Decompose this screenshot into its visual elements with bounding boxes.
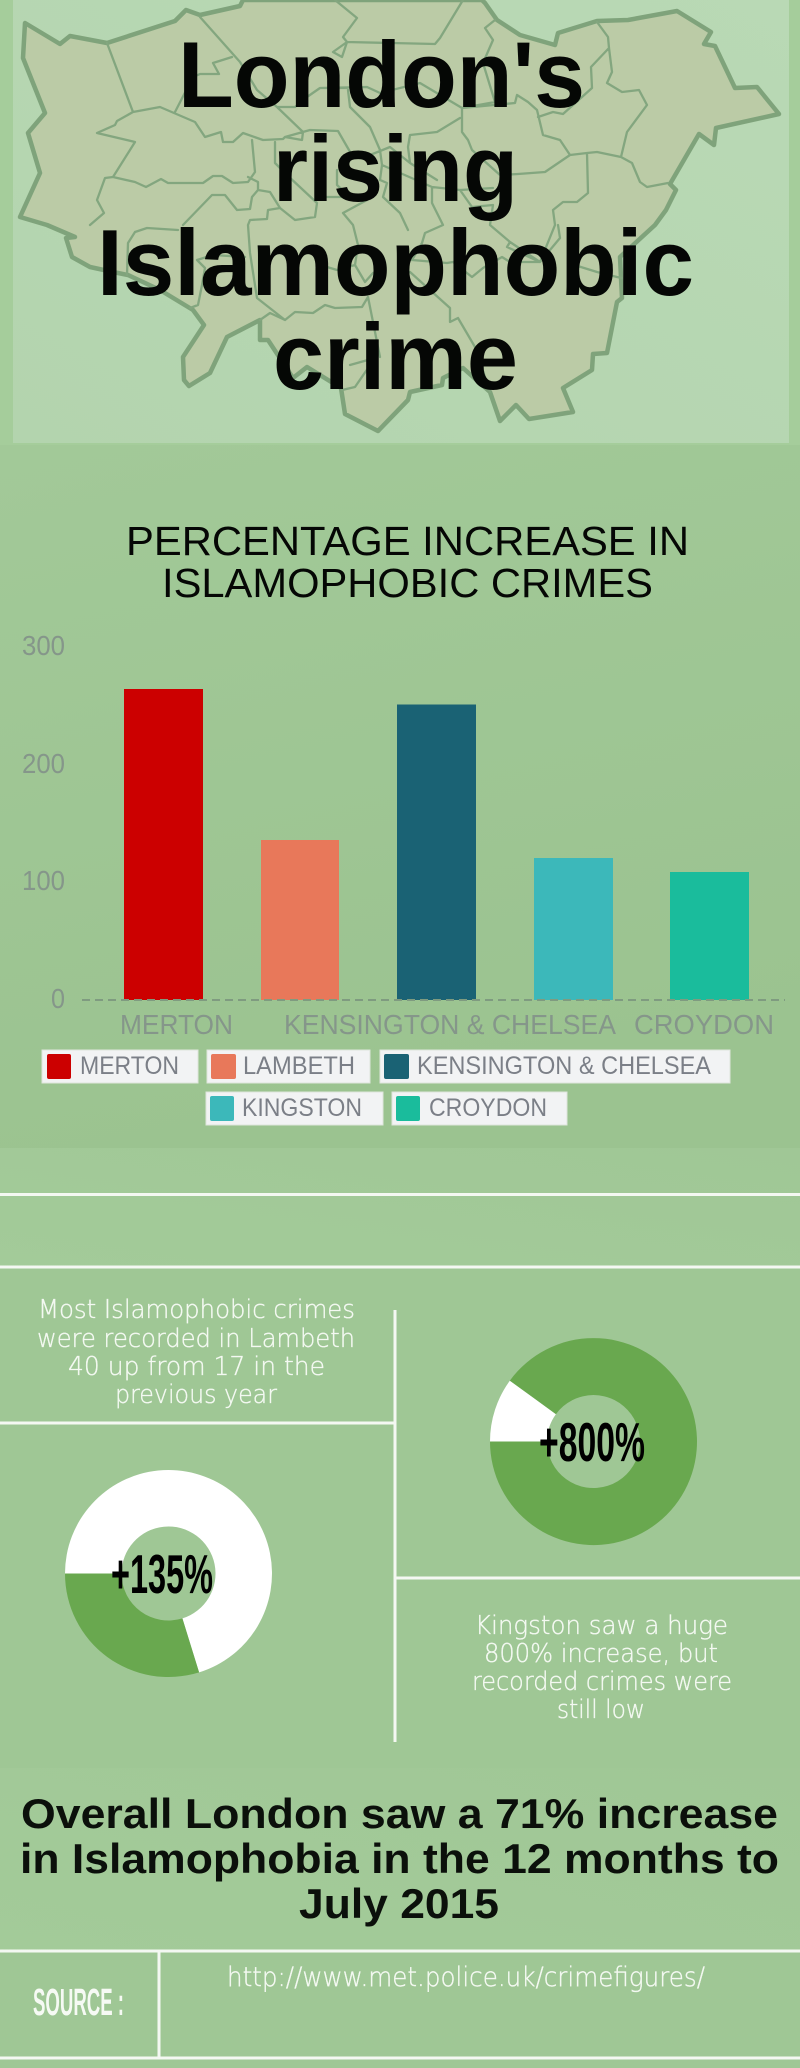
text block: Lambeth: previous year [115, 1380, 277, 1410]
legend: KINGSTON [242, 1094, 362, 1122]
title: Islamophobic [97, 210, 694, 315]
text block: Kingston: still low [557, 1695, 645, 1725]
title: rising [273, 116, 518, 221]
map of London boroughs [20, 0, 779, 431]
chart heading: ISLAMOPHOBIC CRIMES [162, 560, 653, 606]
text block: Kingston [472, 1611, 732, 1725]
text block: Lambeth [37, 1295, 355, 1410]
y axis labels: 100 [22, 865, 65, 896]
donut chart: +800% [490, 1338, 697, 1545]
callout: overall increase [20, 1790, 779, 1927]
x axis labels: CROYDON [634, 1009, 774, 1040]
text block: Lambeth: Most Islamophobic crimes [38, 1295, 355, 1325]
panel: hero [13, 0, 789, 443]
chart heading: PERCENTAGE INCREASE IN [126, 518, 689, 564]
text block: Lambeth: were recorded in Lambeth [37, 1324, 355, 1354]
callout: overall increase: in Islamophobia in the 12 months to [20, 1835, 779, 1882]
y axis labels: 300 [22, 630, 65, 661]
donut chart: +800%: +800% [539, 1411, 645, 1473]
y axis labels: 200 [22, 748, 65, 779]
x axis labels [120, 1009, 774, 1040]
title: crime [273, 304, 518, 409]
y axis labels: 0 [51, 983, 65, 1014]
legend [42, 1050, 730, 1125]
text block: Kingston: recorded crimes were [472, 1667, 732, 1697]
y axis labels [22, 630, 65, 1014]
text block: Kingston: 800% increase, but [484, 1639, 718, 1669]
x axis labels: KENSINGTON & CHELSEA [284, 1009, 616, 1040]
x axis labels: MERTON [120, 1009, 233, 1040]
text: SOURCE : [33, 1982, 124, 2024]
donut chart: +135%: +135% [111, 1543, 213, 1605]
source url: http://www.met.police.uk/crimefigures/ [227, 1962, 705, 1993]
title [97, 22, 694, 409]
chart heading [126, 518, 689, 606]
text block: Lambeth: 40 up from 17 in the [68, 1352, 325, 1382]
legend: MERTON [80, 1052, 179, 1080]
donut chart: +135% [65, 1470, 272, 1677]
callout: overall increase: Overall London saw a 71% increase [21, 1790, 778, 1837]
legend: CROYDON [429, 1094, 547, 1122]
legend: KENSINGTON & CHELSEA [417, 1052, 711, 1080]
legend: LAMBETH [243, 1052, 355, 1080]
panel: bar chart [22, 518, 785, 1125]
title: London's [178, 22, 585, 127]
callout: overall increase: July 2015 [299, 1880, 499, 1927]
text block: Kingston: Kingston saw a huge [475, 1611, 728, 1641]
bars [124, 689, 749, 1000]
